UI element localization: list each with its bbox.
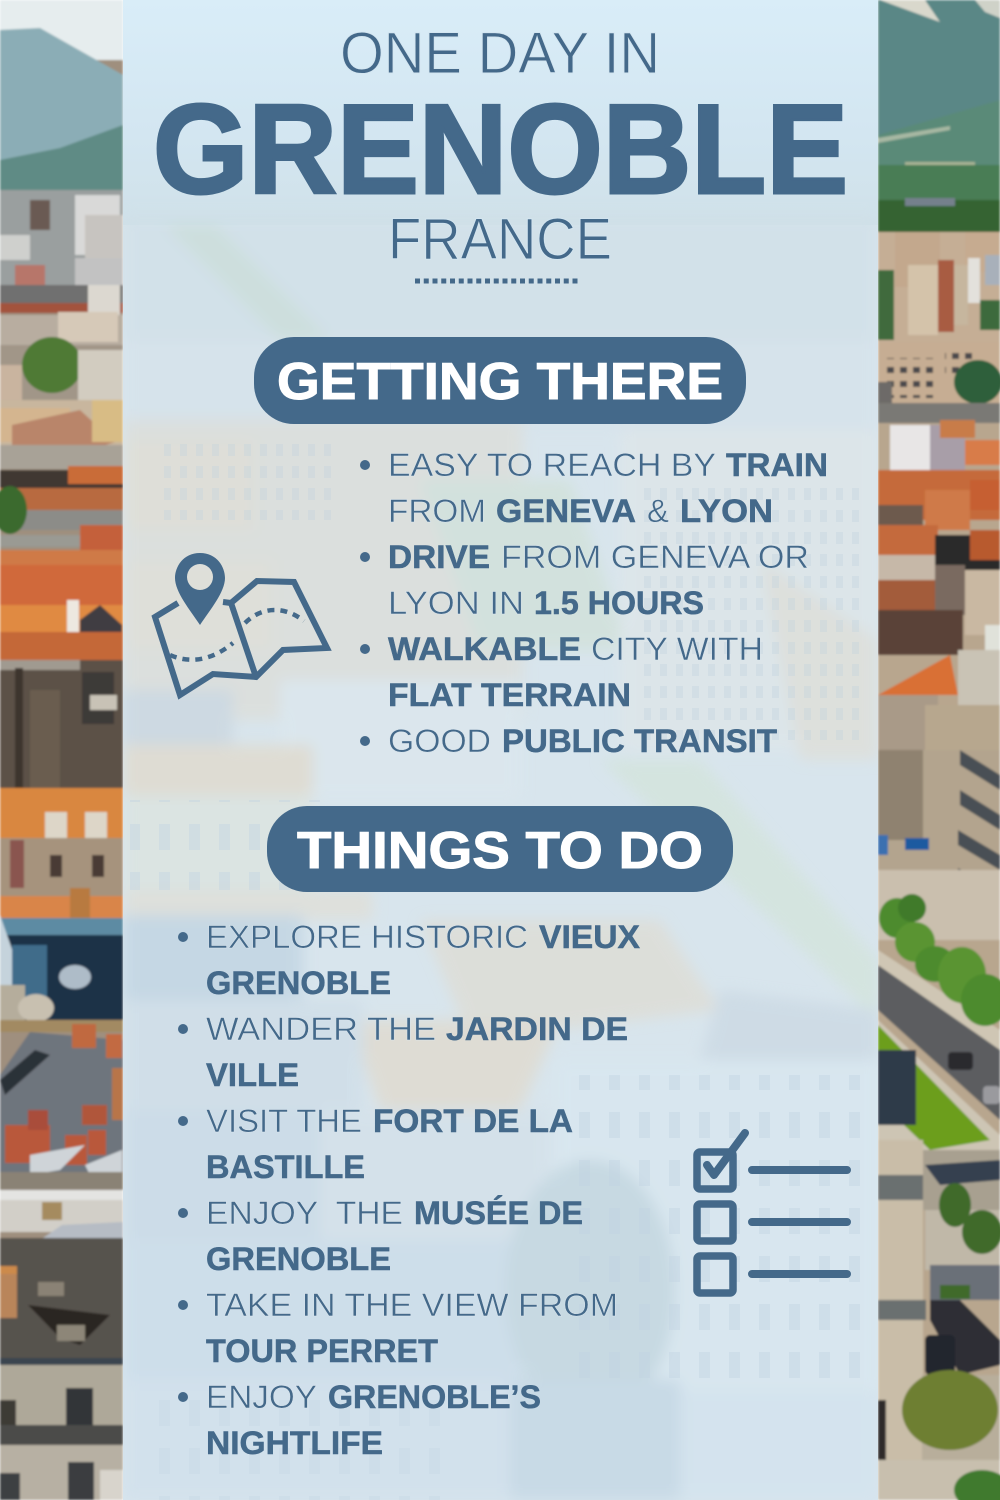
icon: map with location pin [155,553,327,695]
list: things to do [178,919,641,1461]
item: drive: DRIVE [388,539,490,575]
item: musee de grenoble [206,1195,583,1277]
title line: one day in: ONE DAY IN [340,21,660,86]
heading pill: getting there: GETTING THERE [277,353,723,411]
item: fort de la bastille: BASTILLE [206,1149,365,1185]
item: train: LYON [680,493,773,529]
title line: grenoble: GRENOBLE [153,78,848,220]
item: tour perret: TOUR PERRET [206,1333,438,1369]
item: jardin de ville: JARDIN DE [446,1011,628,1047]
item: fort de la bastille: FORT DE LA [373,1103,573,1139]
item: vieux grenoble: EXPLORE HISTORIC [206,919,528,955]
item: train: EASY TO REACH BY [388,447,716,483]
item: musee de grenoble: MUSÉE DE [414,1195,583,1231]
item: drive: LYON IN [388,585,524,621]
title block [153,21,848,272]
item: tour perret: TAKE IN THE VIEW FROM [206,1287,618,1323]
heading pill: things to do: THINGS TO DO [297,822,703,880]
left photo strip [0,0,123,1500]
item: jardin de ville: WANDER THE [206,1011,436,1047]
item: walkable: FLAT TERRAIN [388,677,631,713]
item: vieux grenoble [206,919,641,1001]
item: public transit: GOOD [388,723,491,759]
bullet points [360,460,370,746]
item: fort de la bastille [206,1103,573,1185]
item: train: FROM [388,493,486,529]
item: train: TRAIN [726,447,828,483]
heading pill: getting there [254,337,746,424]
icon: checklist [697,1133,847,1293]
item: train: & [647,493,669,529]
item: drive [388,539,809,621]
item: vieux grenoble: VIEUX [539,919,641,955]
item: walkable: CITY WITH [591,631,763,667]
item: walkable: WALKABLE [388,631,581,667]
item: nightlife: GRENOBLE’S [328,1379,541,1415]
translucent centre panel with faded city [123,0,880,1500]
item: public transit [388,723,777,759]
item: nightlife: NIGHTLIFE [206,1425,383,1461]
item: drive: 1.5 HOURS [534,585,704,621]
item: train: GENEVA [496,493,636,529]
item: drive: FROM GENEVA OR [501,539,809,575]
item: vieux grenoble: GRENOBLE [206,965,391,1001]
right photo strip [878,0,1000,1500]
bullet points [178,932,188,1402]
item: walkable [388,631,763,713]
item: jardin de ville: VILLE [206,1057,299,1093]
item: tour perret [206,1287,618,1369]
item: nightlife [206,1379,541,1461]
item: public transit: PUBLIC TRANSIT [502,723,777,759]
item: musee de grenoble: ENJOY THE [206,1195,403,1231]
heading pill: things to do [267,806,733,892]
item: fort de la bastille: VISIT THE [206,1103,362,1139]
item: train [388,447,828,529]
item: nightlife: ENJOY [206,1379,317,1415]
item: musee de grenoble: GRENOBLE [206,1241,391,1277]
list: getting there [360,447,828,759]
item: jardin de ville [206,1011,628,1093]
title line: france: FRANCE [388,207,612,272]
